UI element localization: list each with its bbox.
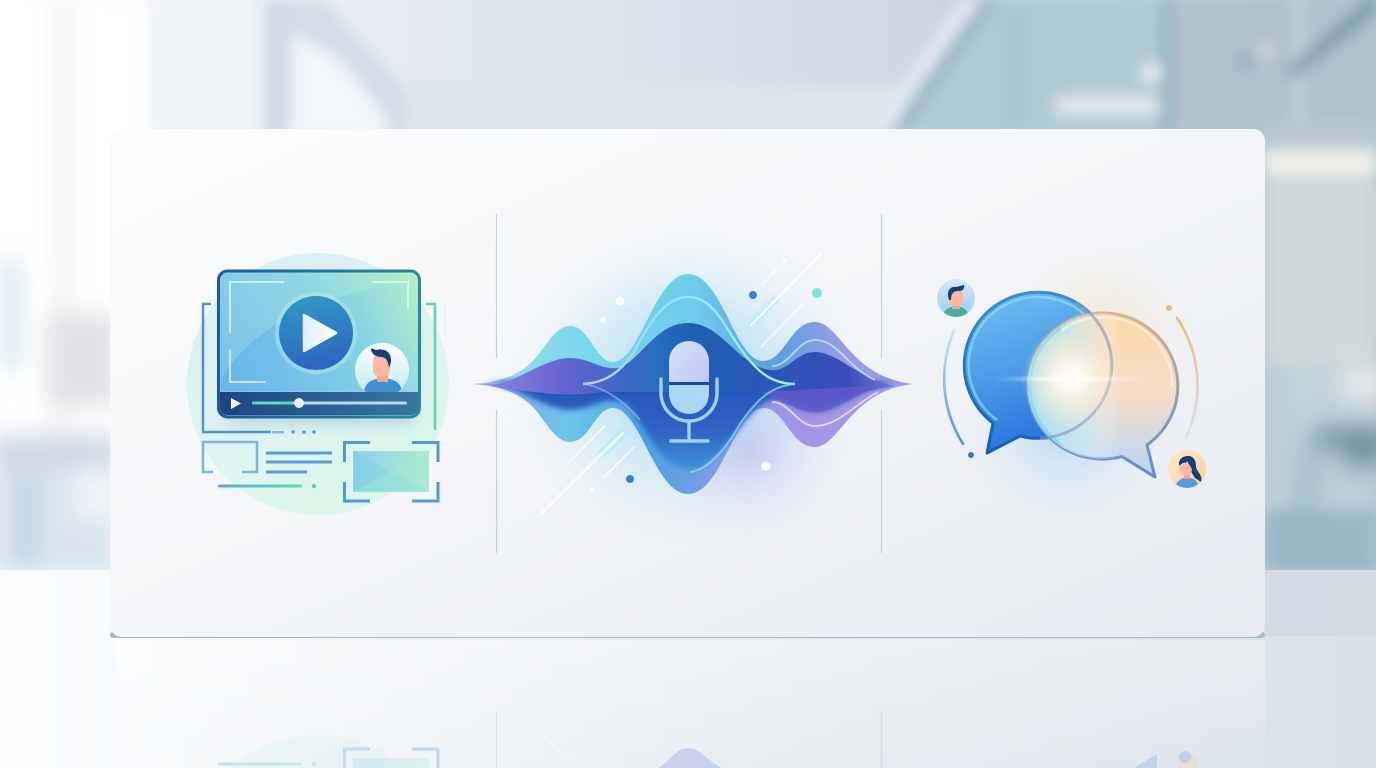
divider left	[496, 214, 498, 553]
wave inner right lobe tint	[760, 385, 890, 412]
main white card	[110, 129, 1265, 638]
screen corner marks	[230, 282, 408, 382]
text lines	[266, 453, 332, 472]
play button	[275, 292, 357, 374]
outer blue bracket	[203, 304, 271, 432]
reflected lines	[218, 712, 882, 768]
icon: microphone	[661, 341, 717, 441]
left arc	[944, 330, 963, 444]
reflected disc	[231, 735, 405, 768]
right center line	[795, 382, 913, 386]
presenter avatar	[355, 343, 409, 392]
divider right	[880, 214, 882, 553]
video frame shadow	[225, 290, 415, 425]
sparks lower left	[542, 426, 634, 513]
sparks upper right	[749, 253, 822, 347]
panel: voice waveform	[473, 220, 914, 550]
avatar: woman	[1168, 450, 1206, 489]
panel: video	[187, 253, 449, 515]
reflected chat	[1134, 751, 1198, 768]
overlap edge of blue bubble	[1040, 302, 1112, 438]
icon: orange speech bubble	[1028, 313, 1178, 477]
right lobe trough	[772, 392, 878, 426]
particles	[600, 296, 770, 470]
wave upper lobes	[473, 274, 914, 384]
left trough line	[583, 384, 640, 420]
panel: conversation	[937, 278, 1206, 496]
dashed detail	[272, 430, 316, 434]
outer green bracket	[426, 304, 435, 430]
lower left box	[203, 442, 257, 472]
reflected spark	[544, 737, 580, 768]
wave trough line	[690, 384, 795, 472]
icon: blue speech bubble	[964, 292, 1112, 453]
control bar	[220, 392, 418, 415]
reflected thumbnail	[344, 749, 438, 768]
background disc	[187, 253, 449, 515]
reflective table surface	[0, 570, 1376, 768]
avatar: man	[937, 279, 975, 318]
light flare	[995, 328, 1147, 428]
right arc	[1177, 318, 1197, 438]
glow	[503, 220, 873, 550]
green progress line	[218, 484, 316, 488]
right lobe crest	[772, 340, 875, 380]
wave inner dark lower	[490, 382, 895, 470]
card reflection on the table	[115, 640, 1265, 768]
image thumbnail	[344, 442, 438, 501]
reflected wave	[658, 748, 722, 768]
video player	[218, 271, 420, 417]
card artwork	[187, 214, 1206, 553]
screen swoosh	[221, 286, 382, 391]
wave crest line	[583, 297, 795, 384]
blurred office background	[0, 0, 1376, 575]
wave inner dark upper	[490, 323, 895, 395]
glow	[960, 245, 1195, 525]
dots	[968, 305, 1172, 458]
wave lower lobes	[473, 384, 914, 494]
left center line	[474, 382, 583, 386]
